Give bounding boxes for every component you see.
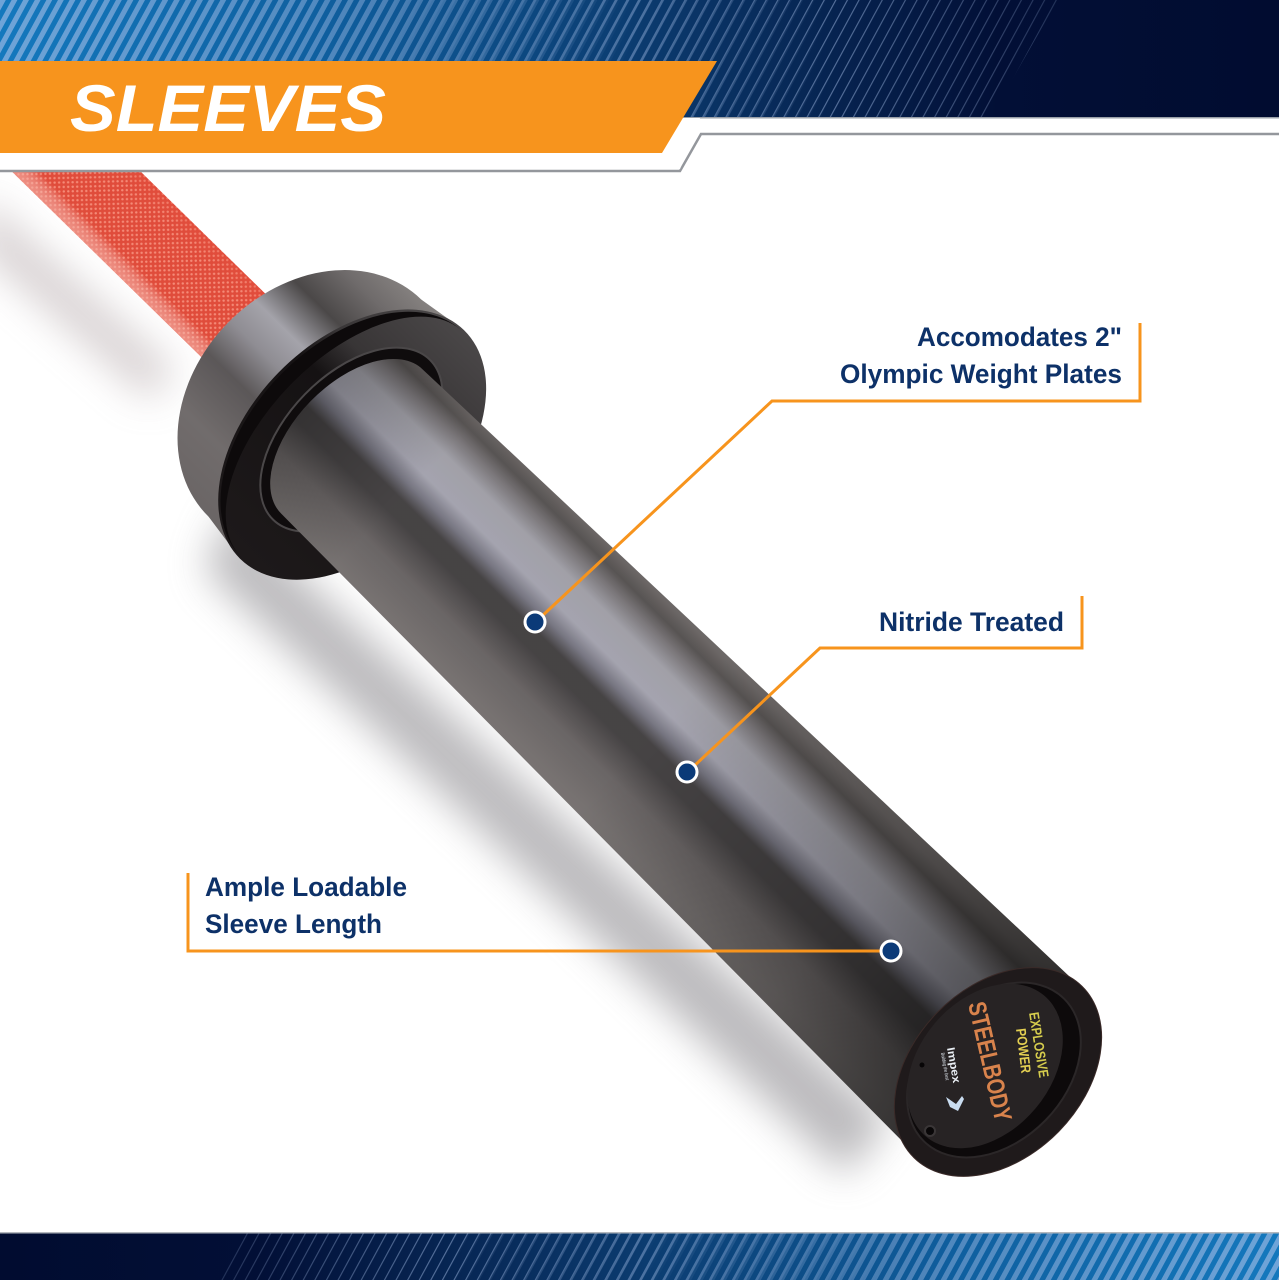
callout: Nitride Treated: Nitride Treated: [879, 607, 1064, 637]
cap text: STEELBODY: STEELBODY: [962, 999, 1017, 1124]
callout: Ample Loadable Sleeve Length: Ample Loadable: [205, 872, 407, 902]
header band: [0, 0, 1279, 118]
sleeve shadow: [0, 195, 890, 1175]
callout: Accomodates 2" Olympic Weight Plates: [525, 322, 1140, 632]
barbell: [6, 102, 1076, 1150]
cap text: POWER: POWER: [1013, 1027, 1034, 1074]
sleeve body: [259, 347, 1070, 1140]
callout: Accomodates 2" Olympic Weight Plates: Olympic Weight Plates: [840, 359, 1122, 389]
end cap: [853, 927, 1143, 1217]
footer band: [0, 1232, 1279, 1280]
cap text: tagline: Building the best: [939, 1052, 950, 1081]
collar: [178, 270, 486, 580]
cap text: Impex: Impex: [944, 1046, 962, 1085]
callout: Ample Loadable Sleeve Length: Sleeve Length: [205, 909, 382, 939]
callout: Nitride Treated: [677, 596, 1082, 782]
callout: Ample Loadable Sleeve Length: [188, 872, 901, 961]
red knurled shaft: [12, 172, 265, 358]
header white step with grey outline: [0, 134, 1279, 171]
icon: impex swoosh: [946, 1096, 964, 1111]
callout: Accomodates 2" Olympic Weight Plates: Accomodates 2": [917, 322, 1122, 352]
title banner: [0, 61, 717, 153]
title: SLEEVES: [70, 71, 386, 145]
cap text: EXPLOSIVE: EXPLOSIVE: [1026, 1011, 1052, 1079]
